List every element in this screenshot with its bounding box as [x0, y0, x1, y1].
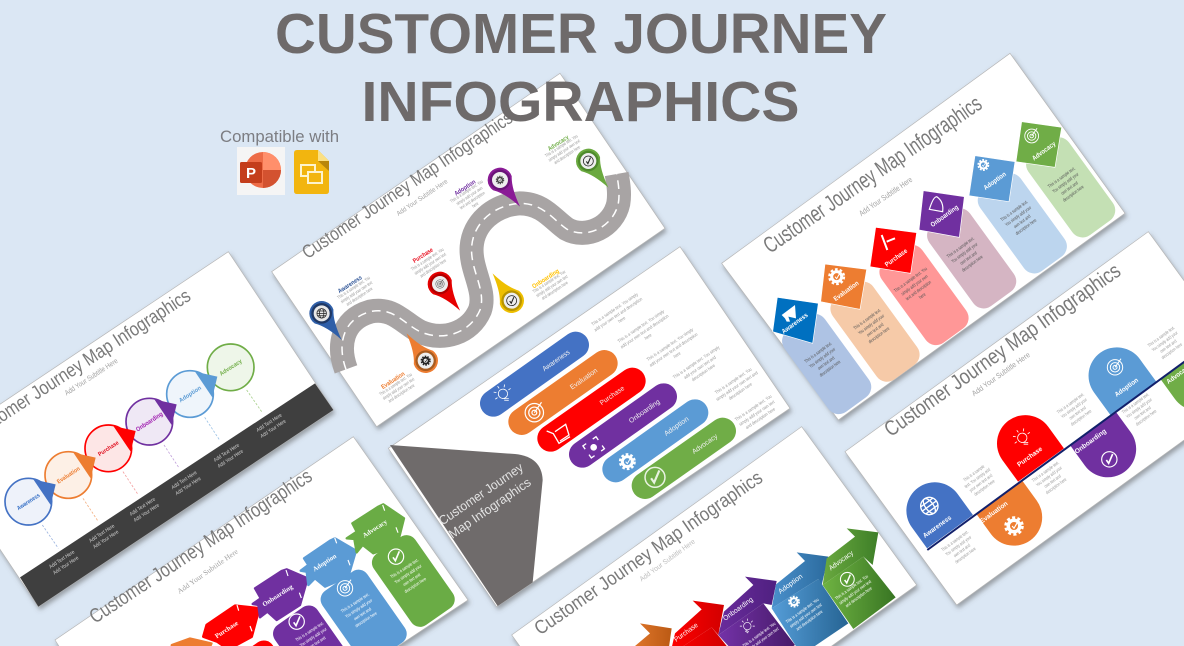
icon: PowerPoint: P [246, 165, 256, 182]
road descriptions: This is a sample text. You [336, 275, 371, 300]
band labels: Add Your Here [260, 419, 287, 440]
step: Evaluation [45, 452, 98, 522]
arrow: Onboarding [253, 569, 308, 620]
tab descriptions: description here [954, 545, 977, 565]
diamond: Onboarding: Onboarding [930, 204, 960, 229]
card descriptions: You simply add your [950, 241, 979, 264]
card descriptions: You simply add your [1051, 171, 1080, 194]
step: Purchase [85, 425, 138, 495]
band labels: Add Your Here [92, 529, 120, 550]
step: Adoption [167, 371, 220, 441]
card icons and text: This is a sample text. [389, 557, 420, 579]
slide subtitle: Add Your Subtitle Here [175, 547, 240, 596]
dark band [20, 383, 333, 607]
arrow: Purchase [203, 605, 259, 646]
road descriptions: text and description [458, 190, 486, 210]
road descriptions: and description here [553, 144, 582, 165]
slide subtitle: Add Your Subtitle Here [857, 175, 914, 218]
band labels: Add Your Here [52, 555, 80, 576]
slide heading: Customer Journey Map Infographics [531, 467, 767, 640]
pill: Purchase: Purchase [599, 385, 626, 407]
pill descriptions: add your own text and description [648, 331, 699, 368]
title: INFOGRAPHICS [362, 70, 800, 133]
card icons and text: own text and [352, 606, 372, 621]
card descriptions: This is a sample text. [946, 235, 975, 259]
card descriptions: This is a sample text. [999, 199, 1029, 222]
icon: Google Slides [294, 150, 329, 194]
card icons and text: You simply add your [393, 563, 423, 585]
arrow steps [170, 504, 459, 646]
panel: feature arrows slide [55, 437, 468, 646]
card descriptions: This is a sample text. You [893, 265, 928, 293]
road descriptions: simply add your own text [381, 376, 416, 401]
road descriptions: simply add your own text [413, 251, 448, 276]
road labels: Advocacy [547, 134, 571, 153]
road descriptions: This is a sample text. You [544, 133, 579, 158]
tab: Adoption [1077, 336, 1156, 415]
tab descriptions: own text and [1159, 338, 1178, 354]
slide subtitle: Add Your Subtitle Here [970, 350, 1032, 398]
timeline rule [927, 360, 1184, 550]
diamond: Purchase [870, 227, 917, 273]
panel: half-pill timeline slide [845, 232, 1184, 605]
band labels [48, 413, 287, 576]
ribbon: Advocacy: Advocacy [828, 550, 855, 572]
road descriptions: This is a sample text. You [449, 178, 484, 204]
compatibility note: Compatible with [220, 127, 339, 146]
road labels: Onboarding [531, 268, 561, 290]
panel: ribbon arrows slide [512, 427, 917, 646]
step: Purchase: Purchase [97, 440, 121, 458]
step: Evaluation: Evaluation [56, 466, 82, 485]
pill descriptions: add your own text and description [619, 313, 670, 350]
diamond: Evaluation: Evaluation [833, 280, 860, 303]
pill: Onboarding [582, 397, 664, 458]
card descriptions: description here [1014, 217, 1038, 236]
road labels: Purchase [412, 246, 435, 265]
road descriptions: and description here [419, 257, 448, 279]
diamond: Awareness [773, 297, 818, 343]
card icons and text: description here [354, 610, 378, 628]
card descriptions: You simply add your [857, 312, 886, 336]
card icons and text: own text and [402, 572, 421, 587]
card descriptions: This is a sample text. [1047, 165, 1076, 189]
tab descriptions: own text and [1133, 404, 1152, 421]
road labels: Adoption [453, 179, 477, 198]
step: Advocacy: Advocacy [219, 358, 244, 378]
step: Onboarding [126, 398, 179, 468]
pill descriptions: This is a sample text. You simply [672, 344, 721, 380]
card descriptions: own text and [816, 355, 836, 371]
tab: Onboarding [1070, 412, 1147, 489]
pill descriptions: This is a sample text. You simply [646, 326, 695, 362]
ribbon: Adoption: This is a sample text. You [784, 597, 820, 624]
road descriptions: and description here [387, 382, 416, 404]
tab descriptions: own text and [952, 542, 972, 558]
diamond: Adoption: Adoption [983, 171, 1008, 192]
road descriptions: simply add your own text [547, 137, 582, 163]
card descriptions: This is a sample text. [852, 307, 882, 331]
ribbon: Advocacy: simply add your own text [838, 578, 873, 606]
band labels: Add Your Here [175, 476, 202, 497]
tab descriptions: description here [1044, 476, 1068, 495]
ribbon: Onboarding [718, 577, 795, 646]
card icons and text: This is a sample text. [340, 591, 370, 614]
band labels: Add Text Here [171, 470, 198, 491]
tab descriptions: This is a sample text. [1056, 391, 1085, 415]
band labels: Add Text Here [129, 497, 157, 518]
tab descriptions: description here [1160, 341, 1184, 360]
road descriptions: simply add your own [455, 185, 484, 206]
tab descriptions [940, 325, 1184, 567]
card descriptions: own text and [1012, 213, 1032, 229]
tab descriptions: You simply add your [1060, 396, 1088, 419]
step: Onboarding: Onboarding [135, 411, 164, 433]
diamond: Adoption [969, 156, 1015, 202]
tab: Evaluation: Evaluation [979, 500, 1009, 525]
pill: Awareness: Awareness [541, 349, 572, 373]
tab descriptions: This is a sample text. [940, 529, 969, 552]
ribbon: Adoption: simply add your own text [788, 601, 823, 629]
card descriptions: own text and [959, 250, 978, 266]
pill: Purchase [547, 381, 632, 443]
pin: Purchase [423, 267, 470, 318]
ribbon: Onboarding: Onboarding [722, 596, 755, 623]
slide subtitle: Add Your Subtitle Here [396, 178, 449, 218]
tab descriptions: text. You simply add [963, 466, 992, 489]
card descriptions: own text and [865, 321, 885, 338]
panel: pills slide [388, 247, 790, 607]
pill descriptions: simply add your own text and [715, 370, 759, 402]
cards [224, 531, 459, 646]
pill descriptions: description here [728, 381, 754, 401]
card descriptions: own text and [1060, 180, 1079, 196]
card descriptions: description here [867, 325, 891, 345]
band labels: Add Your Here [217, 449, 245, 470]
arrow: Adoption [301, 538, 356, 587]
slide heading: Customer Journey Map Infographics [298, 107, 516, 263]
arrow: Purchase: Purchase [214, 620, 240, 640]
card descriptions: This is a sample text. [803, 340, 833, 364]
pill: Adoption [616, 413, 695, 469]
pill descriptions: simply add your own text [738, 399, 776, 427]
card descriptions: text and description [904, 279, 933, 301]
road labels: Awareness [337, 274, 364, 295]
tab: Purchase [986, 404, 1064, 482]
road descriptions: and description here [540, 279, 569, 301]
card descriptions: You simply add your [808, 346, 837, 369]
pill descriptions: This is a sample text. You simply [617, 308, 666, 344]
tab: Adoption: Adoption [1114, 377, 1140, 399]
band labels: Add Text Here [256, 413, 283, 434]
tab descriptions: your own text and [968, 472, 994, 493]
road descriptions: This is a sample text. You [410, 246, 445, 272]
road descriptions: and description here [345, 285, 374, 307]
pill: Evaluation [522, 363, 604, 422]
icon: PowerPoint [237, 147, 285, 195]
ribbon: Advocacy: This is a sample text. You [834, 573, 869, 601]
card icons and text: You simply add your [344, 597, 374, 619]
pill descriptions [589, 291, 780, 433]
pill descriptions: and description here [744, 406, 777, 430]
diamond: Purchase: Purchase [884, 248, 909, 269]
tab descriptions: This is a sample [962, 463, 986, 483]
tab descriptions: You simply add your [1035, 465, 1063, 488]
road descriptions: simply add your own text [535, 273, 569, 298]
tab: Advocacy [1160, 346, 1184, 422]
card descriptions [803, 165, 1088, 380]
band labels: Add Your Here [133, 503, 161, 524]
band labels: Add Text Here [88, 523, 116, 544]
pill: Evaluation: Evaluation [569, 367, 599, 391]
pill descriptions: This is a sample text. You [734, 393, 773, 422]
tab descriptions: description here [1134, 408, 1158, 427]
road descriptions: here [471, 200, 480, 209]
road labels: Evaluation [380, 370, 406, 391]
arrow: Advocacy: Advocacy [362, 518, 389, 540]
tab descriptions: own text and [1043, 473, 1062, 489]
card descriptions: description here [818, 358, 842, 378]
title: CUSTOMER JOURNEY [275, 2, 887, 65]
pin: Awareness [304, 296, 352, 347]
card icons and text: description here [403, 576, 428, 594]
gray title shape: Customer Journey [436, 460, 526, 528]
pill descriptions: description here [691, 362, 717, 382]
tab: Awareness: Awareness [922, 514, 953, 540]
diamond: Evaluation [821, 264, 867, 309]
card descriptions: here [918, 291, 927, 300]
gray title shape: Map Infographics [446, 475, 534, 541]
step: Awareness: Awareness [16, 493, 42, 512]
slide heading: Customer Journey Map Infographics [758, 90, 986, 258]
tab descriptions: This is a sample text. [1121, 391, 1150, 415]
pill descriptions: This is a sample text. You simply [590, 291, 640, 327]
pill descriptions: add your own text and [683, 354, 717, 380]
arrow: Advocacy [347, 504, 404, 553]
tab descriptions: description here [973, 478, 996, 497]
title [275, 2, 887, 133]
ribbon: Evaluation [628, 623, 672, 646]
slide heading: Customer Journey Map Infographics [86, 465, 316, 628]
ribbon: Adoption: and description here [795, 608, 824, 632]
pill: Advocacy: Advocacy [691, 433, 720, 456]
diamond: Onboarding [919, 191, 964, 237]
road descriptions: This is a sample text. You [378, 371, 413, 397]
diamond: Advocacy: Advocacy [1031, 140, 1057, 162]
tab descriptions: This is a sample text. [1146, 325, 1176, 348]
slide heading: Customer Journey Map Infographics [880, 258, 1125, 441]
cards [777, 132, 1120, 419]
panel: road slide [272, 73, 665, 427]
step: Advocacy [207, 344, 262, 412]
ribbon: Purchase [670, 601, 737, 646]
pill: Adoption: Adoption [663, 416, 691, 438]
card icons and text [289, 549, 430, 646]
tab descriptions: You simply add your [1125, 396, 1153, 419]
band labels: Add Text Here [213, 443, 241, 464]
pill: Awareness [490, 345, 576, 406]
tab descriptions: You simply add your [1150, 330, 1179, 353]
pill: Onboarding: Onboarding [628, 399, 662, 425]
arrow: Onboarding: Onboarding [261, 583, 295, 608]
pin: Advocacy [571, 144, 618, 195]
panel: circles slide [0, 252, 333, 607]
tab descriptions: You simply add your [944, 534, 973, 557]
tab: Awareness [895, 471, 973, 548]
tab descriptions: own text and [1068, 404, 1087, 421]
pill descriptions: here [617, 315, 627, 324]
card descriptions: You simply add your [1004, 204, 1033, 227]
pin: Onboarding [482, 266, 529, 318]
slide subtitle: Add Your Subtitle Here [639, 538, 697, 583]
step: Adoption: Adoption [178, 385, 203, 404]
diamond: Advocacy [1016, 122, 1062, 167]
pill descriptions: add your own text and description [593, 296, 644, 333]
arrow: Adoption: Adoption [312, 553, 338, 573]
road descriptions: simply add your own text [339, 279, 374, 304]
tab: Evaluation [976, 481, 1053, 557]
ribbon: Adoption [772, 552, 848, 646]
ribbon: Advocacy [823, 528, 896, 629]
pill descriptions: here [643, 332, 653, 341]
ribbon: Advocacy: and description here [844, 585, 874, 608]
card descriptions: description here [961, 253, 984, 273]
panel: diamonds slide [722, 53, 1125, 420]
tab: Purchase: Purchase [1016, 446, 1044, 469]
card descriptions: simply add your own [900, 273, 929, 297]
tab descriptions: This is a sample text. [1031, 460, 1060, 483]
pill: Advocacy [645, 431, 723, 487]
slide subtitle: Add Your Subtitle Here [63, 356, 119, 397]
road descriptions [336, 133, 585, 406]
tab descriptions: description here [1069, 408, 1093, 427]
ribbon: Purchase: Purchase [673, 622, 700, 644]
band labels: Add Text Here [48, 549, 76, 570]
road labels [337, 134, 571, 391]
tab: Onboarding: Onboarding [1074, 428, 1108, 456]
diamond: Awareness: Awareness [781, 312, 810, 336]
road descriptions: This is a sample text. You [531, 269, 566, 294]
arrow: Evaluation [170, 638, 212, 646]
card descriptions: description here [1062, 183, 1085, 203]
step: Awareness [5, 478, 58, 548]
gray title shape [390, 445, 543, 606]
pill descriptions: here [672, 350, 682, 359]
pin: Evaluation [396, 326, 443, 378]
road [342, 174, 619, 369]
pill descriptions: This is a sample text. You [714, 366, 753, 395]
card icons and text: This is a sample text. [294, 620, 325, 643]
ribbon: Adoption: Adoption [777, 573, 804, 596]
pin: Adoption [483, 163, 530, 214]
